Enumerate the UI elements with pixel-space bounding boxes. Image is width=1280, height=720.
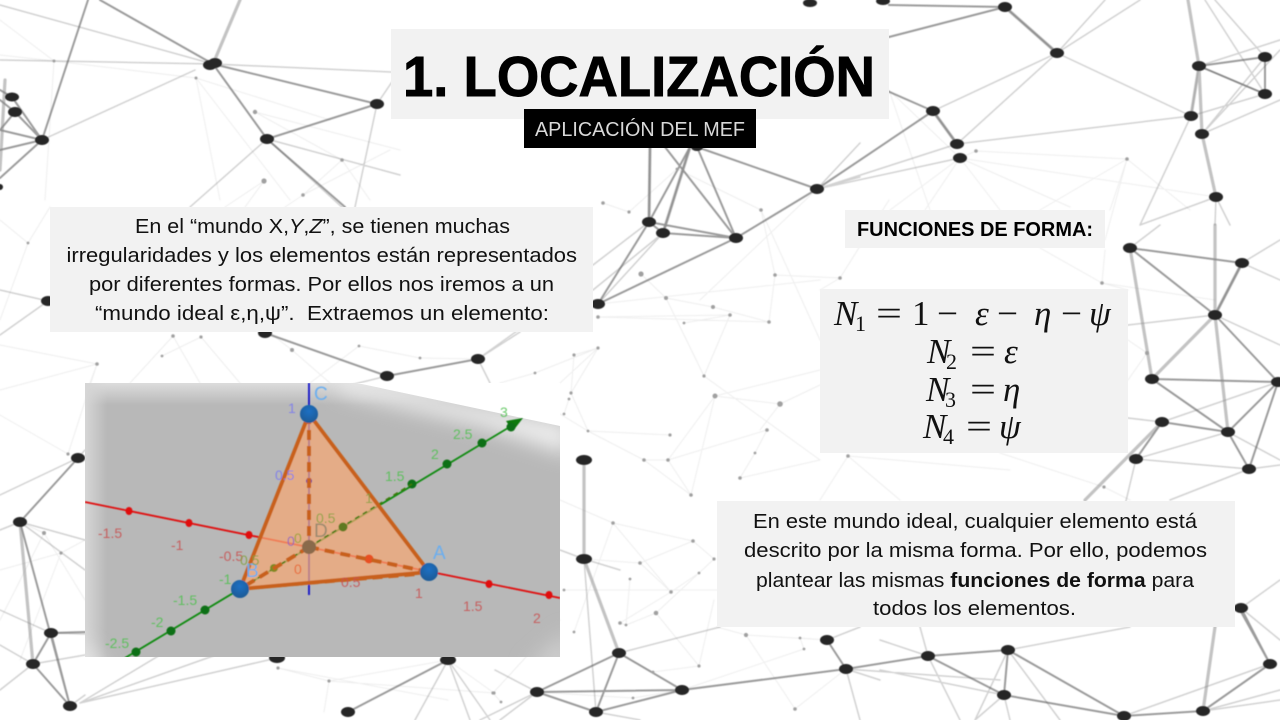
formula N3: N <box>925 370 951 409</box>
formula N2: = <box>970 332 996 371</box>
point labels: B <box>246 561 259 582</box>
formula N1: − <box>937 294 958 333</box>
explanation paragraph: plantear las mismas funciones de forma para <box>756 570 1195 592</box>
formula N1: − <box>997 294 1018 333</box>
hidden axis segments <box>254 478 413 582</box>
point labels: C <box>314 384 328 405</box>
formula N1: − <box>1061 294 1082 333</box>
intro paragraph <box>66 216 577 325</box>
axis labels: 3 <box>500 404 508 420</box>
formula N3: η <box>1003 370 1020 409</box>
subtitle text: APLICACIÓN DEL MEF <box>535 118 745 141</box>
formula N1: ψ <box>1089 294 1112 333</box>
chart: 3D tetrahedron diagram <box>75 378 570 670</box>
formula N2: N <box>926 332 952 371</box>
faint nodes <box>27 60 1149 711</box>
formula N4: = <box>966 407 992 446</box>
formula N3 <box>925 370 1020 412</box>
dashed edges <box>246 422 422 587</box>
formula N4 <box>922 407 1022 449</box>
axis labels: 2 <box>533 610 541 626</box>
formula N1: 1 <box>912 294 930 333</box>
panel: heading funciones de forma <box>845 210 1105 248</box>
heading: 1. LOCALIZACIÓN: 1. LOCALIZACIÓN <box>403 45 875 109</box>
axis labels: 1.5 <box>463 598 483 614</box>
panel: explanation text <box>717 501 1235 627</box>
formula N1: ε <box>975 294 989 333</box>
formula N3: 3 <box>945 387 956 412</box>
formula N4: 4 <box>943 424 954 449</box>
axis labels: 0.5 <box>341 574 361 590</box>
axis labels: 2.5 <box>453 426 473 442</box>
axis labels: -2.5 <box>105 635 129 651</box>
axis labels: 0 <box>294 530 302 546</box>
explanation paragraph <box>744 511 1207 620</box>
formula N3: = <box>970 370 996 409</box>
formula N2: ε <box>1004 332 1018 371</box>
axis labels: 0.5 <box>275 467 295 483</box>
formula N1: 1 <box>855 311 866 336</box>
formula N2: 2 <box>946 349 957 374</box>
intro paragraph: En el “mundo X, Y,Z”, se tienen muchas <box>135 216 510 238</box>
intro paragraph: por diferentes formas. Por ellos nos iremos a un <box>89 274 554 296</box>
formula N1: η <box>1034 294 1051 333</box>
axis labels: 0 <box>294 561 302 577</box>
point labels: A <box>433 543 446 564</box>
axis labels: -1 <box>219 571 232 587</box>
panel: title <box>391 29 889 119</box>
explanation paragraph: descrito por la misma forma. Por ello, podemos <box>744 540 1207 562</box>
vertices <box>231 405 438 598</box>
axis labels: -0.5 <box>219 548 243 564</box>
axis labels <box>98 400 541 651</box>
axis: green <box>125 418 523 658</box>
axis labels: -2 <box>151 614 164 630</box>
formula N4: N <box>922 407 948 446</box>
axis labels: -1 <box>171 537 184 553</box>
explanation paragraph: En este mundo ideal, cualquier elemento está <box>753 511 1198 533</box>
tetrahedron face <box>244 422 423 587</box>
intro paragraph: irregularidades y los elementos están representados <box>66 245 577 267</box>
formula N4: ψ <box>999 407 1022 446</box>
axis labels: 0.5 <box>316 510 336 526</box>
formula N2 <box>926 332 1018 374</box>
panel: subtitle <box>524 109 756 148</box>
point labels <box>246 384 446 582</box>
formula N1: N <box>833 294 859 333</box>
formula N1: = <box>876 294 902 333</box>
axis labels: 0 <box>287 533 295 549</box>
axis labels: 1.5 <box>385 468 405 484</box>
axis labels: 2 <box>431 446 439 462</box>
axis labels: -1.5 <box>173 592 197 608</box>
point labels: D <box>314 521 328 542</box>
axis labels: -1.5 <box>98 525 122 541</box>
solid edges <box>240 414 429 589</box>
axis labels: 1 <box>365 490 373 506</box>
axis labels: 0.5 <box>240 552 260 568</box>
axis: red <box>85 502 560 599</box>
panel: formulas <box>820 289 1128 453</box>
axis labels: 1 <box>288 400 296 416</box>
formula N1 <box>833 294 1112 336</box>
axis labels: 1 <box>415 585 423 601</box>
explanation paragraph: todos los elementos. <box>873 598 1076 620</box>
axis: blue <box>308 383 310 595</box>
intro paragraph: “mundo ideal ε,η,ψ”. Extraemos un elemento: <box>95 303 549 325</box>
panel: intro text <box>50 207 593 332</box>
heading text: FUNCIONES DE FORMA: <box>857 219 1093 241</box>
